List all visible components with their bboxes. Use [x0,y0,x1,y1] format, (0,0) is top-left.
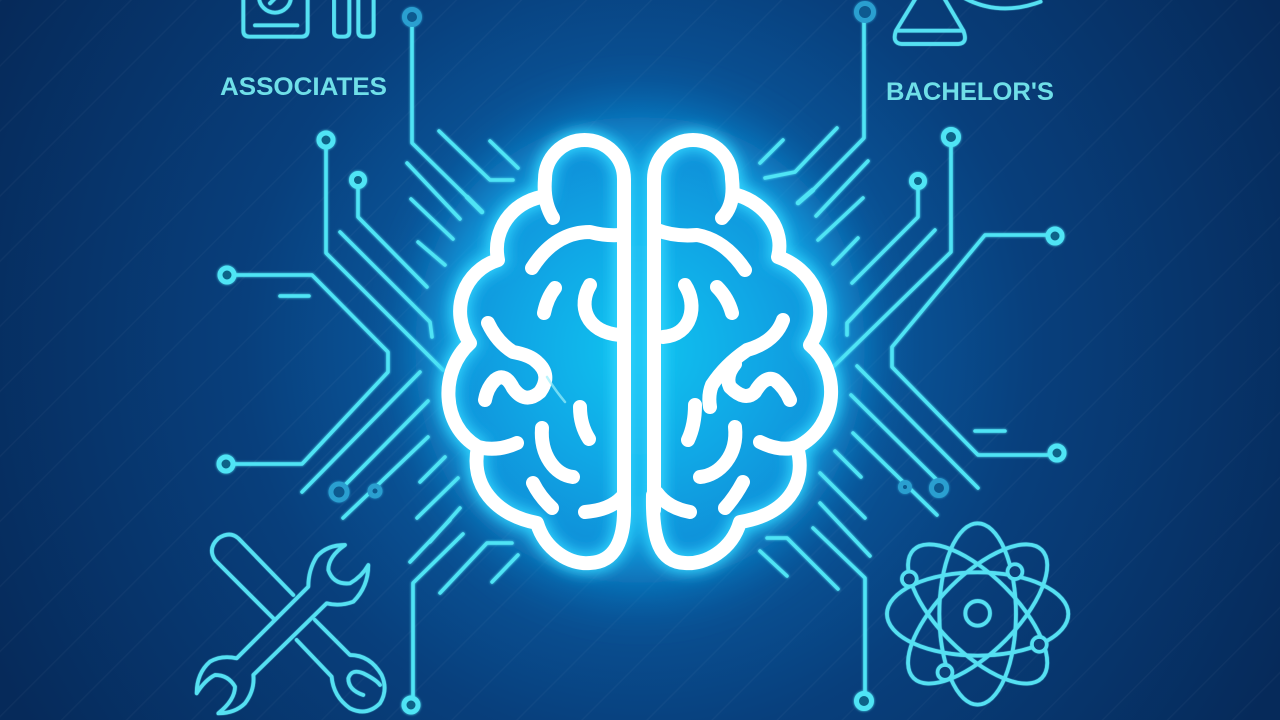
orbits [887,572,1068,656]
brain glow halo [415,100,865,600]
label: associates: ASSOCIATES [220,73,387,101]
brain fill [448,140,831,563]
circuit: lower left traces [302,372,518,696]
label: bachelor's: BACHELOR'S [886,78,1054,106]
brain outer glow [448,140,831,563]
open end spanner [197,545,368,713]
circuit: upper left traces [227,26,518,464]
wrench handle [212,534,293,618]
circuit: lower right traces [760,366,978,692]
brain [448,140,831,563]
ring end [297,620,385,712]
electrons [902,572,917,586]
circuit: upper right traces [760,23,1047,455]
icon: crossed wrench and spanner [197,534,385,713]
brain: left hemisphere outline [448,140,624,563]
brain: left hemisphere folds [485,232,622,512]
brain: right hemisphere outline [653,140,831,563]
icon: certificate top left [243,0,308,37]
circuit traces [219,4,1064,712]
brain: right hemisphere folds [657,230,790,512]
circuit nodes [219,4,1064,712]
icon: flask and dish top right [895,0,1041,44]
icon: atom [886,523,1069,705]
icon: book bars top left [334,0,374,37]
nucleus [965,601,990,626]
